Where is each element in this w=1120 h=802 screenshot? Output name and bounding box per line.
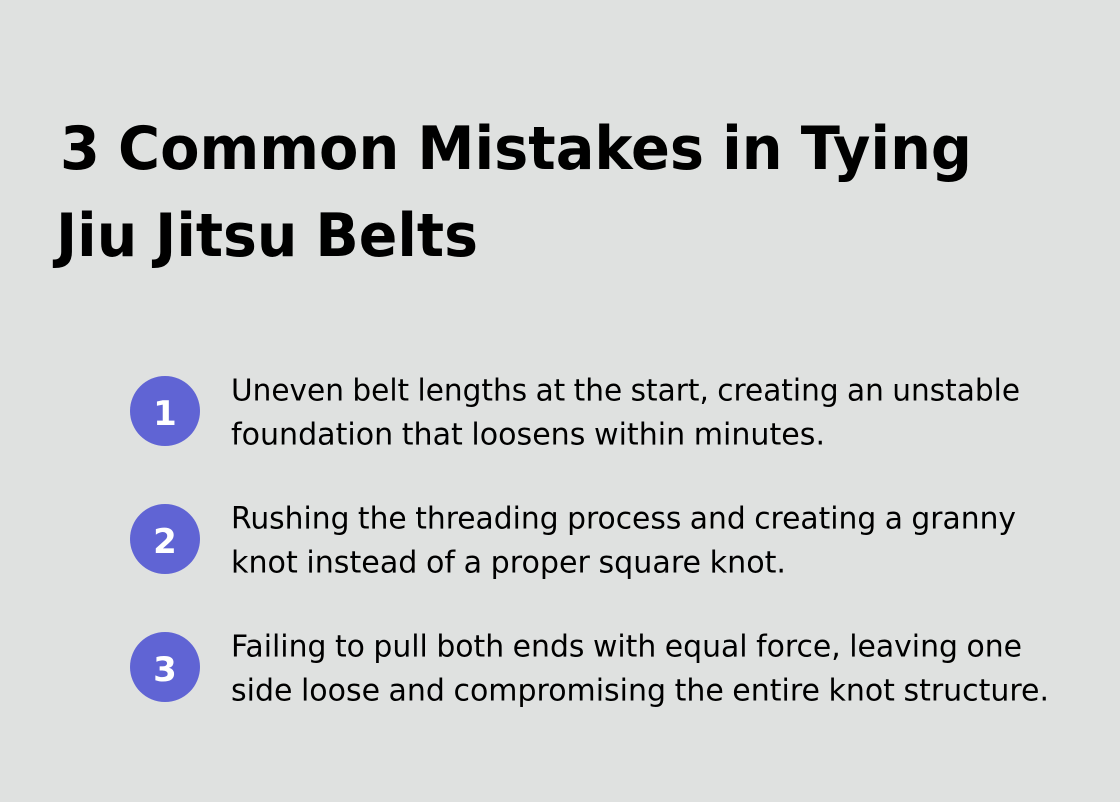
title <box>52 114 972 271</box>
item 3 text: side loose and compromising the entire knot structure. <box>231 674 1049 708</box>
number badge 1 <box>130 376 200 446</box>
title: Jiu Jitsu Belts <box>52 201 478 271</box>
number badge 3 <box>130 632 200 702</box>
title: 3 Common Mistakes in Tying <box>60 114 972 184</box>
item 3 text <box>231 630 1049 708</box>
list item 3 <box>130 630 1049 708</box>
number badge 2 <box>130 504 200 574</box>
item 1 text <box>231 374 1020 452</box>
number badge 2: 2 <box>153 522 177 562</box>
list item 1 <box>130 374 1020 452</box>
item 2 text <box>231 502 1016 580</box>
item 1 text: Uneven belt lengths at the start, creating an unstable <box>231 374 1020 408</box>
item 1 text: foundation that loosens within minutes. <box>231 418 825 452</box>
item 2 text: knot instead of a proper square knot. <box>231 546 786 580</box>
item 2 text: Rushing the threading process and creating a granny <box>231 502 1016 536</box>
number badge 3: 3 <box>153 650 177 690</box>
number badge 1: 1 <box>153 394 177 434</box>
list item 2 <box>130 502 1016 580</box>
item 3 text: Failing to pull both ends with equal force, leaving one <box>231 630 1022 664</box>
